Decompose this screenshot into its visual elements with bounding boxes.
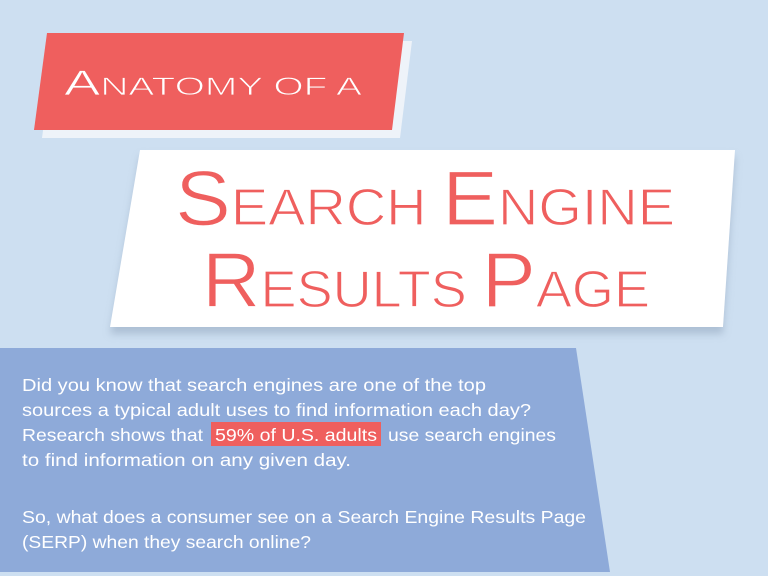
text block: question: So, what does a consumer see on a Search Engine Results Page xyxy=(22,507,586,527)
banner: anatomy of a xyxy=(34,33,412,138)
text block: intro paragraph: Did you know that search engines are one of the top xyxy=(22,375,486,395)
text block: question: (SERP) when they search online? xyxy=(22,532,311,552)
text block: question xyxy=(22,507,586,552)
heading: search engine: SEARCH ENGINE xyxy=(175,154,675,242)
text block: intro paragraph: to find information on any given day. xyxy=(22,450,351,470)
text block: intro paragraph: 59% of U.S. adults xyxy=(215,425,377,445)
banner: search engine results page xyxy=(110,150,735,334)
text block: intro paragraph: use search engines xyxy=(388,425,556,445)
heading: anatomy of a: A NATOMY OF A xyxy=(64,64,363,103)
heading: results page: RESULTS PAGE xyxy=(202,236,650,324)
text block: intro paragraph: sources a typical adult uses to find information each day? xyxy=(22,400,531,420)
text block: intro paragraph: Research shows that xyxy=(22,425,203,445)
highlight: 59% of U.S. adults xyxy=(211,422,381,446)
panel: intro text xyxy=(0,348,610,572)
text block: intro paragraph xyxy=(22,375,556,470)
